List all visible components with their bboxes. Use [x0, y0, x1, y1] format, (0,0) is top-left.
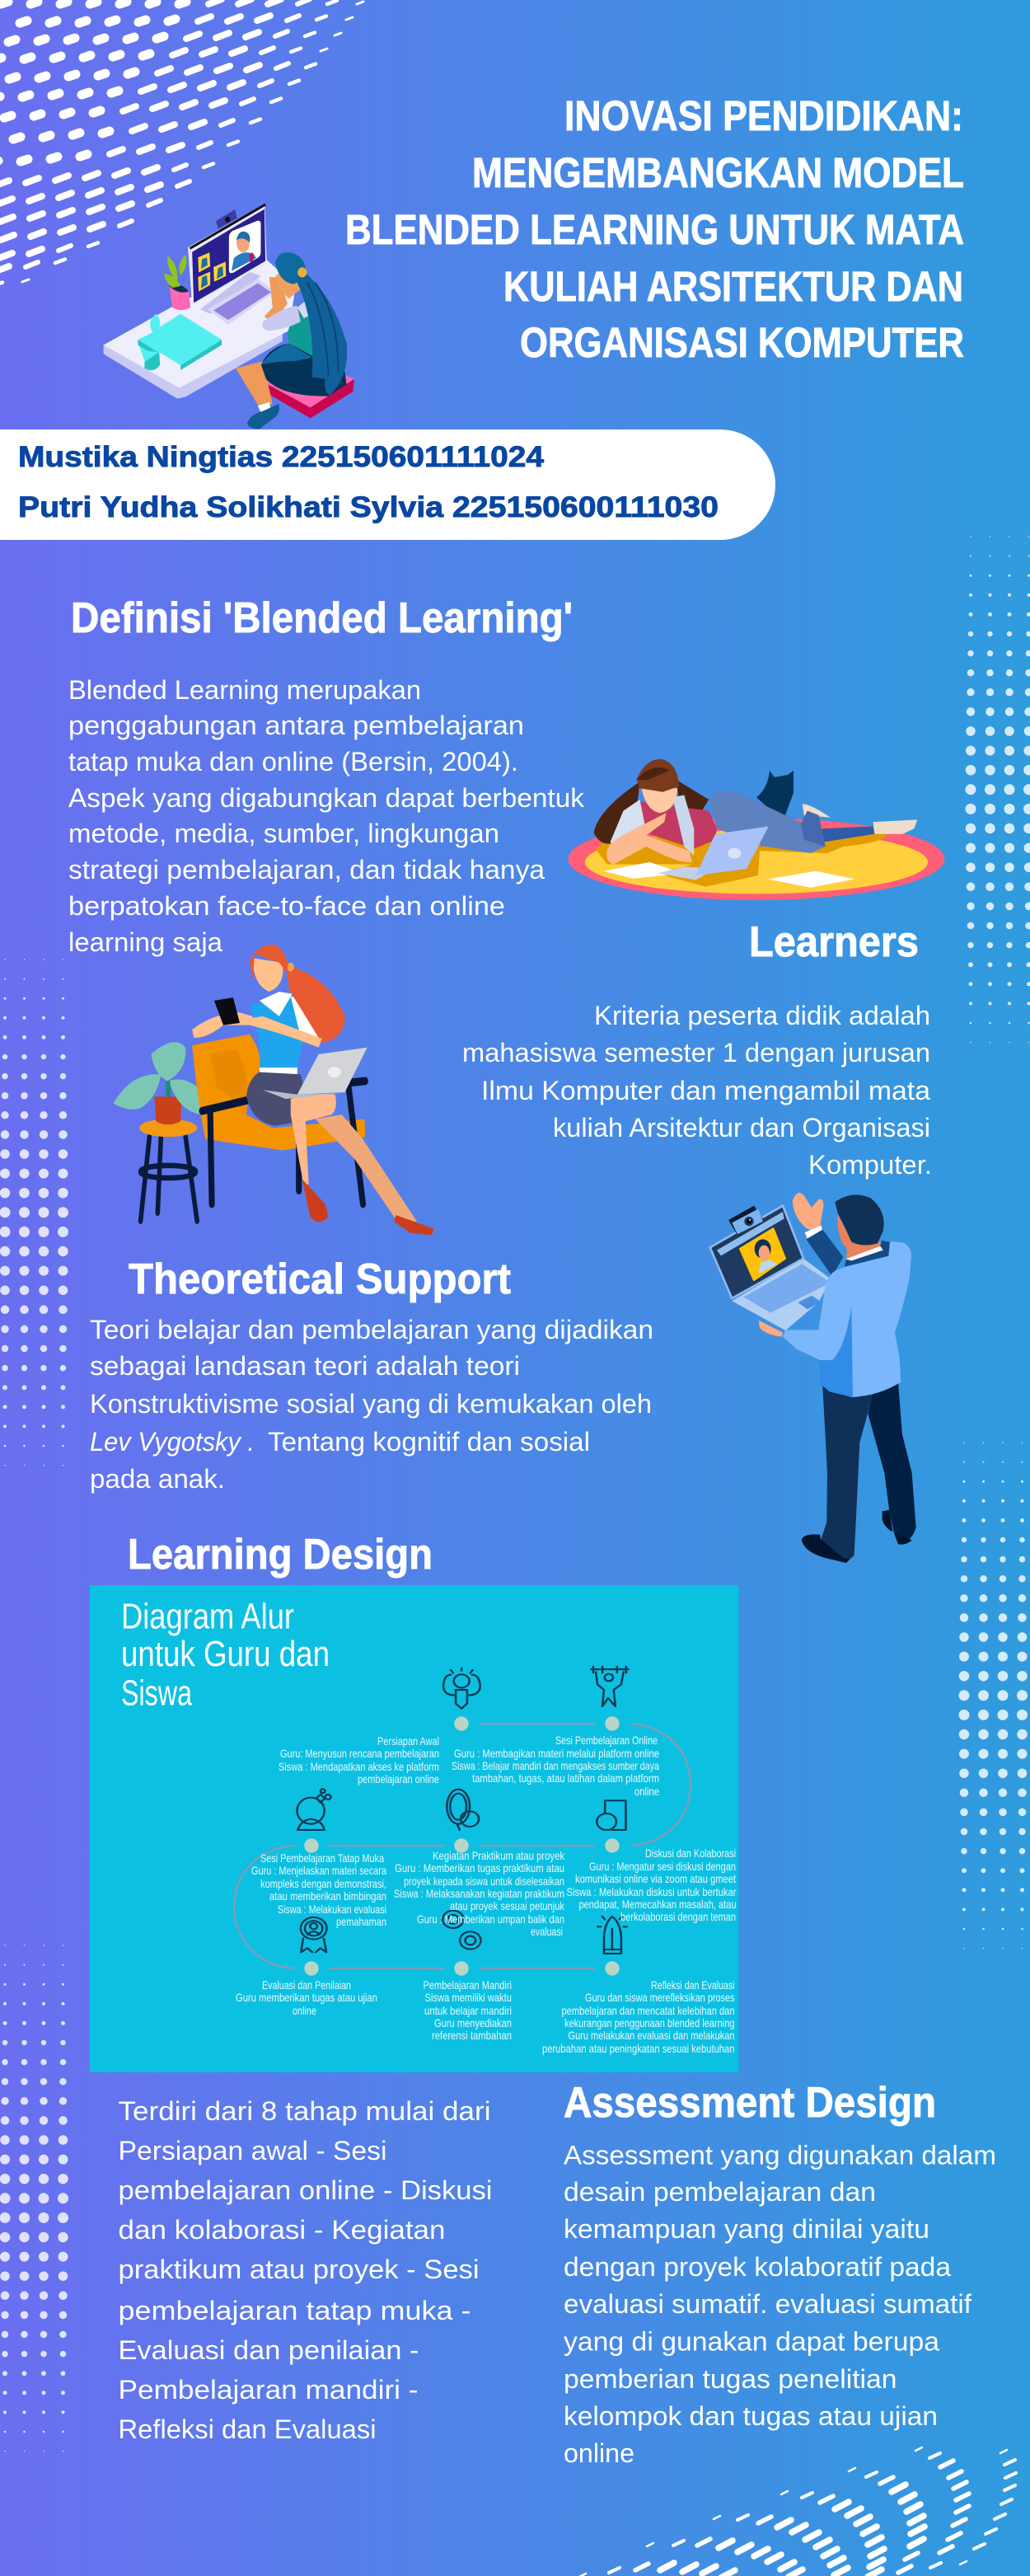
text: learners: Kriteria peserta didik adalah [594, 1001, 930, 1030]
text: theoretical support [90, 1315, 653, 1494]
text: assessment design: pemberian tugas penelitian [564, 2364, 897, 2394]
step 7: Pembelajaran Mandiri: untuk belajar mandiri [424, 2004, 512, 2017]
text: learning design stages: praktikum atau proyek - Sesi [119, 2255, 480, 2284]
diagram title: Siswa [121, 1673, 192, 1713]
step 3: Diskusi dan Kolaborasi: Diskusi dan Kolaborasi [645, 1846, 736, 1860]
step 4: Kegiatan Praktikum: atau proyek sesuai petunjuk [450, 1899, 565, 1912]
text: theoretical support: Tentang kognitif dan sosial [268, 1427, 590, 1457]
title: ORGANISASI KOMPUTER [520, 319, 964, 366]
text: definition: strategi pembelajaran, dan tidak hanya [68, 855, 545, 884]
step 8: Refleksi dan Evaluasi: kekurangan penggunaan blended learning [564, 2016, 735, 2029]
step 7: Pembelajaran Mandiri: Siswa memiliki waktu [425, 1991, 512, 2004]
step 3: Diskusi dan Kolaborasi [567, 1846, 737, 1923]
text: assessment design: desain pembelajaran dan [564, 2177, 876, 2207]
step 6: Evaluasi dan Penilaian [236, 1978, 377, 2017]
step 1: Persiapan Awal: Siswa : Mendapatkan akses ke platform [279, 1760, 439, 1773]
halftone dots: right upper [971, 537, 1029, 1043]
step 4: Kegiatan Praktikum: Siswa : Melaksanakan kegiatan praktikum [394, 1887, 564, 1900]
text: definition: Aspek yang digabungkan dapat berbentuk [68, 783, 585, 813]
text: learning design stages: Persiapan awal - Sesi [119, 2136, 387, 2165]
step 6: Evaluasi dan Penilaian: Guru memberikan tugas atau ujian [236, 1991, 377, 2004]
title: INOVASI PENDIDIKAN: [564, 92, 963, 139]
halftone dots: left lower [5, 1945, 63, 2452]
heading: Learning Design: Learning Design [128, 1531, 433, 1579]
text: definition: metode, media, sumber, lingkungan [68, 819, 499, 848]
step 1: Persiapan Awal: pembelajaran online [358, 1772, 439, 1785]
step 5: Sesi Pembelajaran Tatap Muka: kompleks dengan demonstrasi, [260, 1877, 386, 1890]
step 8: Refleksi dan Evaluasi: pembelajaran dan mencatat kelebihan dan [562, 2004, 735, 2017]
step 3: Diskusi dan Kolaborasi: Siswa : Melakukan diskusi untuk bertukar [567, 1885, 737, 1898]
heading: Learners: Learners [749, 918, 919, 966]
step 5: Sesi Pembelajaran Tatap Muka: Guru : Menjelaskan materi secara [251, 1864, 386, 1877]
step 7: Pembelajaran Mandiri: Guru menyediakan [434, 2016, 512, 2029]
text: assessment design: online [564, 2438, 634, 2468]
step 3: Diskusi dan Kolaborasi: berkolaborasi dengan teman [620, 1910, 736, 1923]
text: learning design stages: dan kolaborasi - Kegiatan [119, 2215, 445, 2245]
step 1: Persiapan Awal: Guru: Menyusun rencana pembelajaran [280, 1747, 439, 1760]
illustration: student at desk with video call [104, 204, 354, 429]
halftone pattern: bottom right [579, 2447, 1016, 2576]
illustration: girl lying on rug with laptop [569, 759, 944, 900]
step 2: Sesi Pembelajaran Online [452, 1734, 659, 1798]
text: learning design stages: pembelajaran online - Diskusi [119, 2175, 493, 2205]
step 7: Pembelajaran Mandiri: Pembelajaran Mandiri [424, 1978, 512, 1992]
step 5: Sesi Pembelajaran Tatap Muka: Siswa : Melakukan evaluasi [278, 1903, 386, 1916]
step 2: Sesi Pembelajaran Online: Guru : Membagikan materi melalui platform online [454, 1747, 659, 1760]
text: learning design stages: Terdiri dari 8 tahap mulai dari [119, 2096, 491, 2126]
step 4: Kegiatan Praktikum: Guru : Memberikan umpan balik dan [417, 1912, 564, 1926]
title: MENGEMBANGKAN MODEL [472, 149, 964, 196]
diagram title: untuk Guru dan [121, 1634, 330, 1674]
illustration: woman in armchair with phone and laptop [114, 945, 433, 1235]
step 5: Sesi Pembelajaran Tatap Muka [251, 1851, 386, 1928]
step 6: Evaluasi dan Penilaian: online [293, 2004, 316, 2017]
step 2: Sesi Pembelajaran Online: tambahan, tugas, atau latihan dalam platform [472, 1771, 659, 1785]
step 6: Evaluasi dan Penilaian: Evaluasi dan Penilaian [262, 1978, 351, 1992]
panel: flow diagram [90, 1585, 738, 2072]
step 5: Sesi Pembelajaran Tatap Muka: Sesi Pembelajaran Tatap Muka [260, 1851, 384, 1865]
step 2: Sesi Pembelajaran Online: Siswa : Belajar mandiri dan mengakses sumber daya [452, 1759, 659, 1772]
heading: Assessment Design: Assessment Design [564, 2079, 936, 2127]
halftone pattern: top left [0, 0, 363, 286]
heading: Theoretical Support: Theoretical Support [129, 1255, 511, 1303]
text: theoretical support: Konstruktivisme sosial yang di kemukakan oleh [90, 1389, 652, 1419]
step 3: Diskusi dan Kolaborasi: Guru : Mengatur sesi diskusi dengan [589, 1860, 736, 1873]
step 8: Refleksi dan Evaluasi: Guru dan siswa merefleksikan proses [585, 1991, 735, 2004]
step 3: Diskusi dan Kolaborasi: komunikasi online via zoom atau gmeet [575, 1872, 736, 1885]
step 7: Pembelajaran Mandiri: referensi tambahan [432, 2029, 512, 2042]
step 4: Kegiatan Praktikum: Kegiatan Praktikum atau proyek [433, 1849, 565, 1862]
text: learning design stages [119, 2096, 493, 2444]
text: definition: tatap muka dan online (Bersin, 2004). [68, 747, 518, 777]
halftone dots: left upper [5, 960, 63, 1466]
diagram title [121, 1596, 330, 1713]
text: learners: Komputer. [808, 1150, 932, 1180]
diagram icons [297, 1667, 629, 1954]
text: assessment design: kelompok dan tugas atau ujian [564, 2401, 938, 2431]
text: learners: mahasiswa semester 1 dengan jurusan [462, 1038, 930, 1067]
heading: Definisi Blended Learning: Definisi 'Blended Learning' [71, 594, 573, 642]
text: theoretical support: sebagai landasan teori adalah teori [90, 1351, 520, 1381]
text: theoretical support: Lev Vygotsky . [90, 1427, 255, 1457]
text: assessment design: yang di gunakan dapat berupa [564, 2326, 939, 2356]
step 4: Kegiatan Praktikum [394, 1849, 565, 1938]
step 4: Kegiatan Praktikum: proyek kepada siswa untuk diselesaikan [404, 1875, 564, 1888]
step 5: Sesi Pembelajaran Tatap Muka: pemahaman [336, 1915, 386, 1928]
step 1: Persiapan Awal: Persiapan Awal [377, 1734, 439, 1748]
step 2: Sesi Pembelajaran Online: online [634, 1785, 659, 1798]
step 5: Sesi Pembelajaran Tatap Muka: atau memberikan bimbingan [269, 1889, 386, 1903]
text: learning design stages: pembelajaran tatap muka - [119, 2296, 471, 2325]
text: assessment design: evaluasi sumatif. evaluasi sumatif [564, 2289, 971, 2319]
text: assessment design: kemampuan yang dinilai yaitu [564, 2214, 929, 2244]
illustration: man holding laptop with video call [710, 1193, 916, 1563]
step 8: Refleksi dan Evaluasi: perubahan atau peningkatan sesuai kebutuhan [542, 2042, 735, 2055]
text: assessment design: Assessment yang digunakan dalam [564, 2140, 996, 2170]
text: learning design stages: Evaluasi dan penilaian - [119, 2335, 419, 2365]
step 4: Kegiatan Praktikum: evaluasi [531, 1925, 563, 1938]
text: definition: Blended Learning merupakan [68, 675, 421, 705]
step 3: Diskusi dan Kolaborasi: pendapat, Memecahkan masalah, atau [578, 1898, 737, 1911]
text: theoretical support: Teori belajar dan pembelajaran yang dijadikan [90, 1315, 653, 1344]
step 8: Refleksi dan Evaluasi: Refleksi dan Evaluasi [651, 1978, 735, 1992]
text: definition: penggabungan antara pembelajaran [68, 711, 524, 740]
flow path connectors [234, 1724, 691, 1968]
text: learners: kuliah Arsitektur dan Organisasi [553, 1113, 930, 1143]
text: learning design stages: Pembelajaran mandiri - [119, 2375, 419, 2405]
text: learners: Ilmu Komputer dan mengambil mata [481, 1076, 930, 1105]
author names pill: Mustika Ningtias 225150601111024 [18, 441, 545, 473]
step 1: Persiapan Awal [279, 1734, 439, 1785]
step 8: Refleksi dan Evaluasi [542, 1978, 735, 2055]
text: definition: berpatokan face-to-face dan online [68, 891, 505, 921]
title: KULIAH ARSITEKTUR DAN [503, 263, 963, 310]
text: theoretical support: pada anak. [90, 1464, 225, 1494]
text: definition: learning saja [68, 927, 222, 957]
text: learning design stages: Refleksi dan Evaluasi [119, 2414, 376, 2444]
author names pill [0, 429, 775, 540]
text: definition [68, 675, 585, 957]
halftone dots: right lower [964, 1443, 1023, 1949]
title [345, 92, 964, 366]
diagram title: Diagram Alur [121, 1596, 294, 1637]
text: learners [462, 1001, 932, 1180]
step 8: Refleksi dan Evaluasi: Guru melakukan evaluasi dan melakukan [569, 2029, 735, 2042]
text: assessment design [564, 2140, 996, 2468]
author names pill: Putri Yudha Solikhati Sylvia 225150600111030 [18, 491, 719, 523]
step 7: Pembelajaran Mandiri [424, 1978, 512, 2042]
text: assessment design: dengan proyek kolaboratif pada [564, 2252, 951, 2282]
flow nodes [304, 1716, 620, 1976]
step 2: Sesi Pembelajaran Online: Sesi Pembelajaran Online [555, 1734, 658, 1747]
step 4: Kegiatan Praktikum: Guru : Memberikan tugas praktikum atau [395, 1861, 564, 1875]
